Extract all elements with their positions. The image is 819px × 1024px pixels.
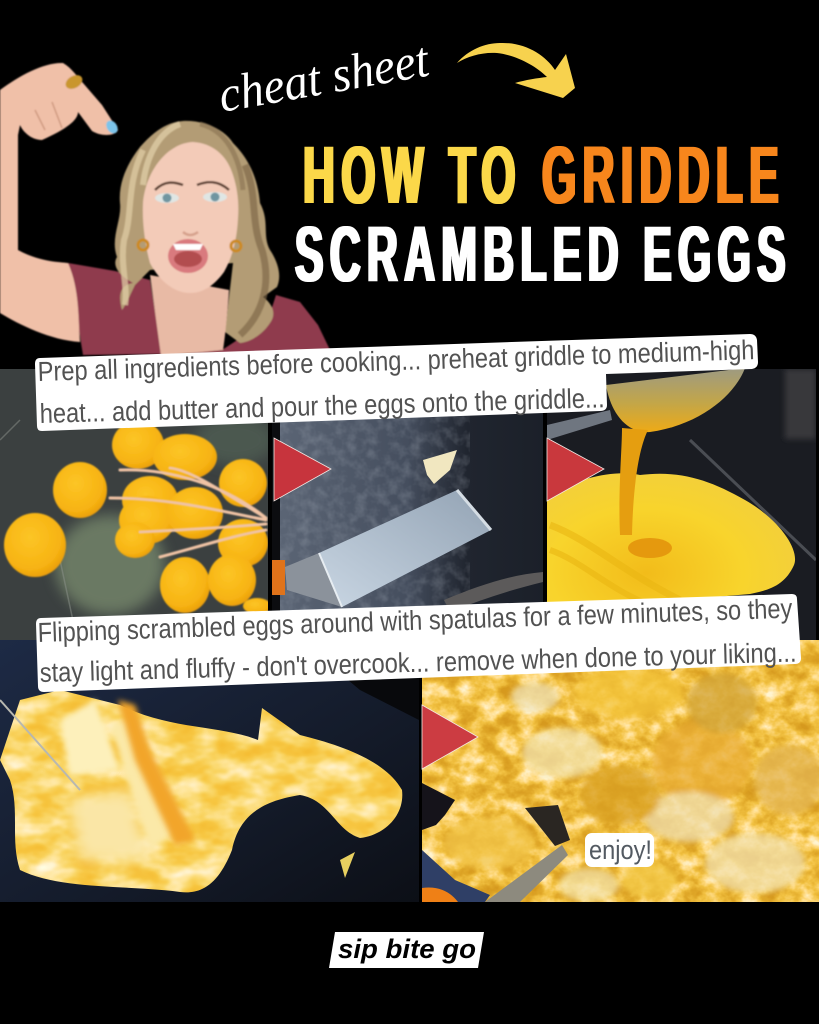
caption: prep steps: heat... add butter and pour the eggs onto the griddle... [39,382,605,429]
butter [423,450,457,484]
neck and chest [150,275,229,356]
arm and hand [0,63,118,342]
caption: flipping steps [36,593,801,692]
earrings [138,240,148,250]
arrow triangle 1 [274,438,331,501]
eyes [155,193,179,203]
presenter pointing at title [0,63,331,356]
nose [183,232,198,235]
ring [63,72,85,92]
photo: eggs being flipped on griddle [0,640,419,902]
photo: finished scrambled eggs [422,640,819,902]
arrow triangle 2 [547,438,604,501]
face [143,142,238,293]
caption: enjoy: enjoy! [589,835,652,865]
curved yellow arrow [457,43,575,98]
shirt [68,263,331,355]
eggs on griddle [0,691,402,892]
spatula [285,490,491,607]
arrow triangle 3 [422,705,478,769]
caption: prep steps [35,334,758,431]
logo: sip bite go: sip bite go [338,934,476,964]
title line 1: HOW TO [303,130,522,221]
hair [115,121,279,343]
mouth [168,239,208,273]
photo: pouring eggs onto griddle [547,368,816,640]
photo: yolks and whisk in bowl [0,369,275,640]
nail [104,118,120,136]
photo: butter and spatula on griddle [272,413,543,610]
script heading: cheat sheet: cheat sheet [214,31,434,123]
